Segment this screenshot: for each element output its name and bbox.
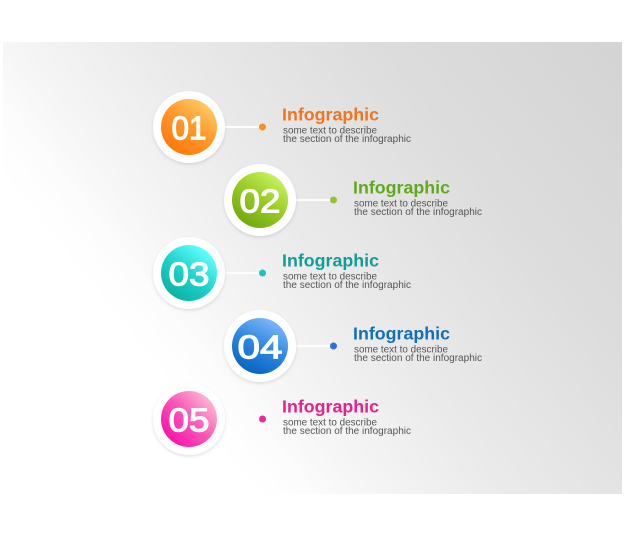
connector line 03	[225, 272, 259, 274]
description 01: some text to describe	[283, 126, 377, 136]
step 03	[153, 237, 411, 309]
heading 05: Infographic	[282, 396, 379, 416]
number badge 01	[161, 99, 217, 155]
connector line 02	[296, 199, 330, 201]
dot 03	[259, 270, 266, 276]
number 02: 02	[240, 184, 280, 220]
number badge 02	[232, 172, 288, 228]
description 01: the section of the infographic	[283, 134, 411, 145]
description 03: the section of the infographic	[283, 280, 411, 291]
white ring 04	[224, 310, 296, 382]
white ring 02	[224, 164, 296, 236]
description 02: some text to describe	[354, 198, 448, 210]
number badge 03	[161, 245, 217, 301]
white ring 01	[153, 91, 225, 163]
number badge 04	[232, 318, 288, 374]
description 03: some text to describe	[283, 272, 377, 282]
heading 04: Infographic	[353, 324, 450, 344]
dot 02	[330, 196, 337, 204]
step 02	[224, 164, 482, 236]
connector line 04	[296, 345, 330, 347]
number 05: 05	[168, 402, 210, 440]
description 02: the section of the infographic	[354, 207, 482, 218]
step 04	[224, 310, 482, 382]
number 03: 03	[168, 256, 210, 294]
number 04: 04	[238, 330, 282, 366]
dot 05	[259, 416, 266, 422]
connector line 05	[225, 418, 259, 420]
heading 03: Infographic	[282, 250, 379, 270]
description 05: some text to describe	[283, 418, 377, 428]
number badge 05	[161, 391, 217, 447]
step 05	[153, 383, 411, 455]
dot 01	[259, 124, 266, 130]
description 04: the section of the infographic	[354, 353, 482, 364]
connector line 01	[225, 126, 259, 128]
description 05: the section of the infographic	[283, 426, 411, 437]
white ring 03	[153, 237, 225, 309]
heading 01: Infographic	[282, 104, 379, 124]
description 04: some text to describe	[354, 344, 448, 356]
step 01	[153, 91, 411, 163]
number 01: 01	[172, 110, 206, 148]
dot 04	[330, 342, 337, 350]
white ring 05	[153, 383, 225, 455]
heading 02: Infographic	[353, 178, 450, 198]
